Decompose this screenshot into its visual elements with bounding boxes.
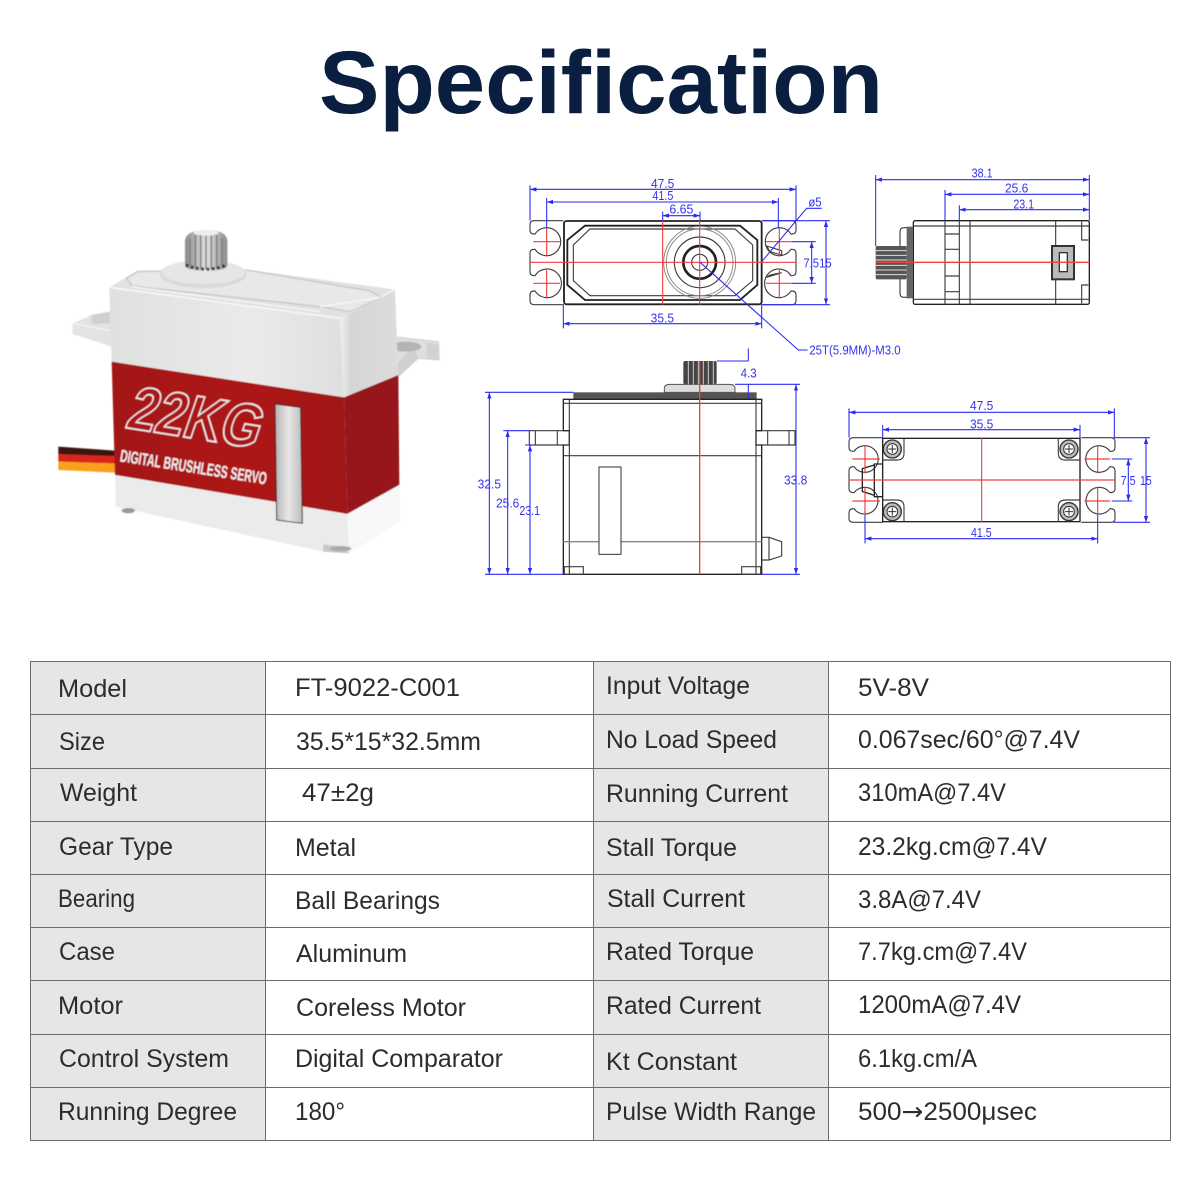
row: weight / running current bbox=[60, 779, 1006, 808]
dimension labels: 25T(5.9MM)-M3.0 bbox=[809, 342, 901, 357]
dimension labels: 25.6 bbox=[496, 496, 519, 511]
case top silver bbox=[109, 270, 398, 397]
centre lines bbox=[849, 438, 1115, 522]
centre line bbox=[698, 361, 702, 574]
servo product photo bbox=[58, 230, 439, 553]
row: gear type / stall torque: Gear Type bbox=[59, 833, 173, 861]
row: gear type / stall torque: Metal bbox=[295, 834, 356, 862]
mounting ears bbox=[849, 438, 1115, 522]
row: case / rated torque: Aluminum bbox=[296, 940, 407, 968]
dimension labels: 41.5 bbox=[971, 525, 992, 540]
servo wires bbox=[58, 447, 115, 473]
row: motor / rated current: Motor bbox=[58, 992, 123, 1020]
dimension labels: 23.1 bbox=[1013, 196, 1034, 211]
dimension labels: 33.8 bbox=[784, 473, 807, 488]
row: bearing / stall current: Bearing bbox=[58, 885, 135, 913]
silver window bbox=[275, 404, 302, 523]
front body bbox=[529, 392, 795, 574]
base plate bbox=[883, 438, 1080, 522]
red label band bbox=[112, 362, 399, 514]
dimension labels: ø5 bbox=[808, 195, 822, 210]
row: size / no load speed: 0.067sec/60°@7.4V bbox=[858, 726, 1080, 754]
row: bearing / stall current: Stall Current bbox=[607, 885, 745, 913]
label: 22KG: 22KG bbox=[119, 375, 274, 462]
silver base bbox=[115, 475, 400, 553]
corner screws bbox=[883, 440, 1078, 521]
row: size / no load speed: 35.5*15*32.5mm bbox=[296, 728, 481, 756]
row: size / no load speed bbox=[59, 726, 1080, 756]
row: case / rated torque: Rated Torque bbox=[606, 938, 754, 966]
dimension labels: 38.1 bbox=[972, 166, 993, 181]
row: control system / kt constant: Digital Comparator bbox=[295, 1045, 503, 1073]
row: weight / running current: Weight bbox=[60, 779, 137, 807]
centre line bbox=[876, 260, 1089, 264]
dimension labels: 41.5 bbox=[652, 188, 673, 203]
dimension labels: 6.65 bbox=[669, 201, 693, 216]
drawing: bottom view bbox=[849, 398, 1152, 543]
row: running degree / pulse width range: 500→2500μsec bbox=[858, 1097, 1037, 1126]
row: weight / running current: 310mA@7.4V bbox=[858, 779, 1006, 807]
dimension labels: 32.5 bbox=[478, 476, 501, 491]
dimension labels: 7.5 bbox=[1121, 473, 1136, 488]
row: case / rated torque bbox=[59, 938, 1027, 968]
drawing: top view bbox=[530, 176, 901, 357]
dimension labels bbox=[970, 398, 1152, 540]
dimension lines bbox=[876, 175, 1089, 246]
dimension labels bbox=[972, 166, 1034, 211]
row: bearing / stall current: Ball Bearings bbox=[295, 887, 440, 915]
row: bearing / stall current: 3.8A@7.4V bbox=[858, 886, 981, 914]
row: running degree / pulse width range bbox=[58, 1097, 1037, 1126]
specification table bbox=[30, 661, 1170, 1140]
row: gear type / stall torque bbox=[59, 833, 1047, 862]
dimension labels: 7.515 bbox=[803, 256, 832, 271]
row: gear type / stall torque: Stall Torque bbox=[606, 834, 737, 862]
output spline bbox=[185, 230, 227, 271]
right mounting ear bbox=[345, 337, 439, 377]
row: weight / running current: 47±2g bbox=[302, 779, 374, 807]
row: weight / running current: Running Current bbox=[606, 780, 788, 808]
row: control system / kt constant: Kt Constant bbox=[606, 1048, 737, 1076]
row: size / no load speed: Size bbox=[59, 728, 105, 756]
row: control system / kt constant bbox=[59, 1045, 977, 1076]
row: model / input voltage: 5V-8V bbox=[858, 674, 929, 702]
row: model / input voltage: Model bbox=[58, 675, 127, 703]
side body bbox=[900, 221, 1089, 304]
row: control system / kt constant: 6.1kg.cm/A bbox=[858, 1045, 977, 1073]
row: gear type / stall torque: 23.2kg.cm@7.4V bbox=[858, 833, 1047, 861]
row: control system / kt constant: Control System bbox=[59, 1045, 229, 1073]
centre lines bbox=[530, 221, 796, 305]
dimension labels: 47.5 bbox=[970, 398, 993, 413]
row: size / no load speed: No Load Speed bbox=[606, 726, 777, 754]
output collar bbox=[160, 260, 247, 288]
connector bbox=[862, 464, 882, 497]
row: motor / rated current: Coreless Motor bbox=[296, 994, 466, 1022]
mounting ears bbox=[530, 221, 796, 305]
left mounting ear bbox=[73, 312, 112, 347]
row: case / rated torque: 7.7kg.cm@7.4V bbox=[858, 938, 1027, 966]
dimension labels: 25.6 bbox=[1005, 181, 1028, 196]
case outline bbox=[564, 221, 762, 304]
dimension labels: 15 bbox=[1140, 473, 1152, 488]
row: motor / rated current: Rated Current bbox=[606, 992, 761, 1020]
table grid bbox=[30, 661, 1170, 1140]
dimension labels bbox=[651, 176, 901, 357]
dimension lines bbox=[849, 408, 1150, 543]
title: Specification bbox=[319, 32, 883, 132]
drawing: side view from output shaft bbox=[876, 166, 1089, 304]
row: motor / rated current bbox=[58, 991, 1021, 1022]
drawing: front view bbox=[478, 348, 807, 574]
output circles bbox=[664, 226, 736, 298]
dimension labels: 35.5 bbox=[970, 416, 993, 431]
dimension lines bbox=[485, 348, 800, 574]
row: running degree / pulse width range: 180° bbox=[295, 1098, 345, 1126]
dimension labels bbox=[478, 366, 807, 518]
dimension lines bbox=[530, 185, 830, 350]
row: running degree / pulse width range: Pulse Width Range bbox=[606, 1098, 816, 1126]
pinion bbox=[876, 246, 907, 279]
dimension labels: 23.1 bbox=[519, 503, 540, 518]
label: digital brushless servo: DIGITAL BRUSHLESS SERVO bbox=[119, 446, 268, 488]
row: bearing / stall current bbox=[58, 885, 981, 915]
dimension labels: 35.5 bbox=[651, 310, 674, 325]
row: model / input voltage: Input Voltage bbox=[606, 672, 750, 700]
pinion bbox=[683, 361, 717, 384]
row: model / input voltage bbox=[58, 672, 929, 703]
row: motor / rated current: 1200mA@7.4V bbox=[858, 991, 1021, 1019]
connector bbox=[1052, 246, 1074, 279]
output collar bbox=[664, 384, 735, 392]
row: running degree / pulse width range: Running Degree bbox=[58, 1098, 237, 1126]
row: case / rated torque: Case bbox=[59, 938, 115, 966]
dimension labels: 47.5 bbox=[651, 176, 674, 191]
row: model / input voltage: FT-9022-C001 bbox=[295, 674, 460, 702]
dimension labels: 4.3 bbox=[741, 366, 757, 381]
